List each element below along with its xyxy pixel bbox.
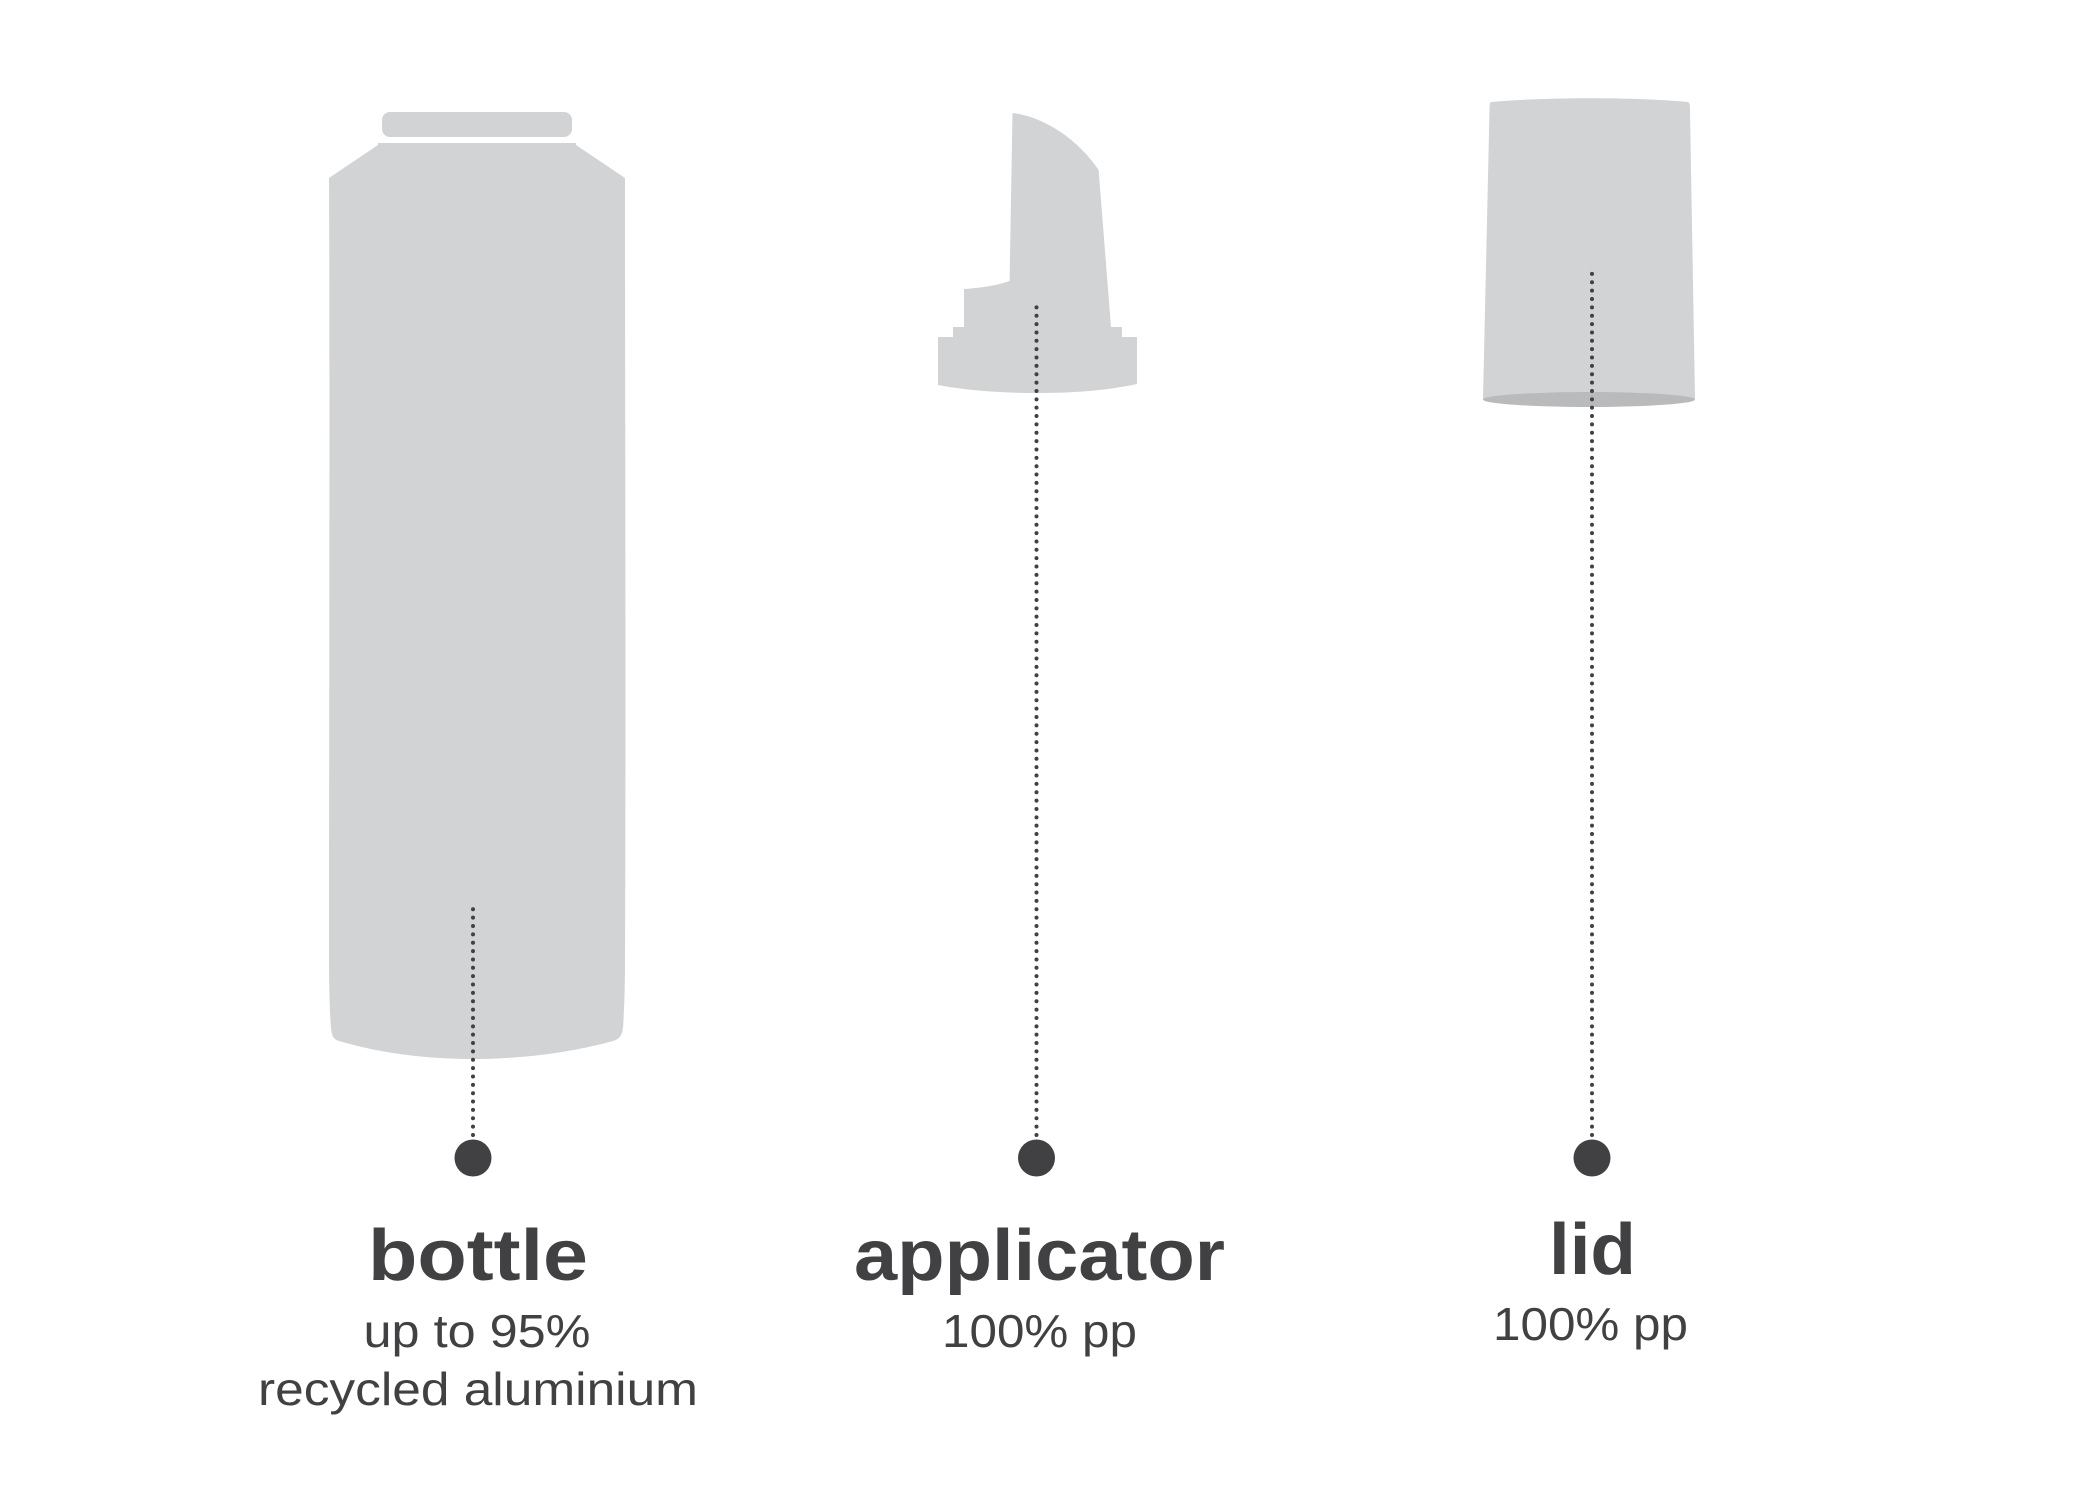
icon: applicator silhouette <box>938 113 1137 393</box>
text: applicator material: 100% pp <box>942 1305 1137 1357</box>
heading: bottle: bottle <box>368 1216 588 1296</box>
text: bottle material line 2: recycled aluminium <box>258 1363 698 1415</box>
text: bottle material line 1: up to 95% <box>364 1305 590 1357</box>
panel: applicator <box>854 113 1225 1357</box>
marker dot: applicator <box>1018 1140 1055 1176</box>
marker dot: lid <box>1574 1140 1610 1176</box>
panel: bottle <box>258 112 698 1415</box>
heading: applicator: applicator <box>854 1216 1225 1296</box>
dotted leader: applicator <box>1034 307 1038 1135</box>
dotted leader: bottle <box>471 909 475 1135</box>
marker dot: bottle <box>454 1140 492 1176</box>
heading: lid: lid <box>1549 1210 1636 1290</box>
dotted leader: lid <box>1590 273 1594 1135</box>
text: lid material: 100% pp <box>1493 1298 1688 1350</box>
panel: lid <box>1483 98 1695 1350</box>
icon: bottle silhouette <box>329 112 625 1059</box>
icon: lid silhouette <box>1483 98 1695 407</box>
